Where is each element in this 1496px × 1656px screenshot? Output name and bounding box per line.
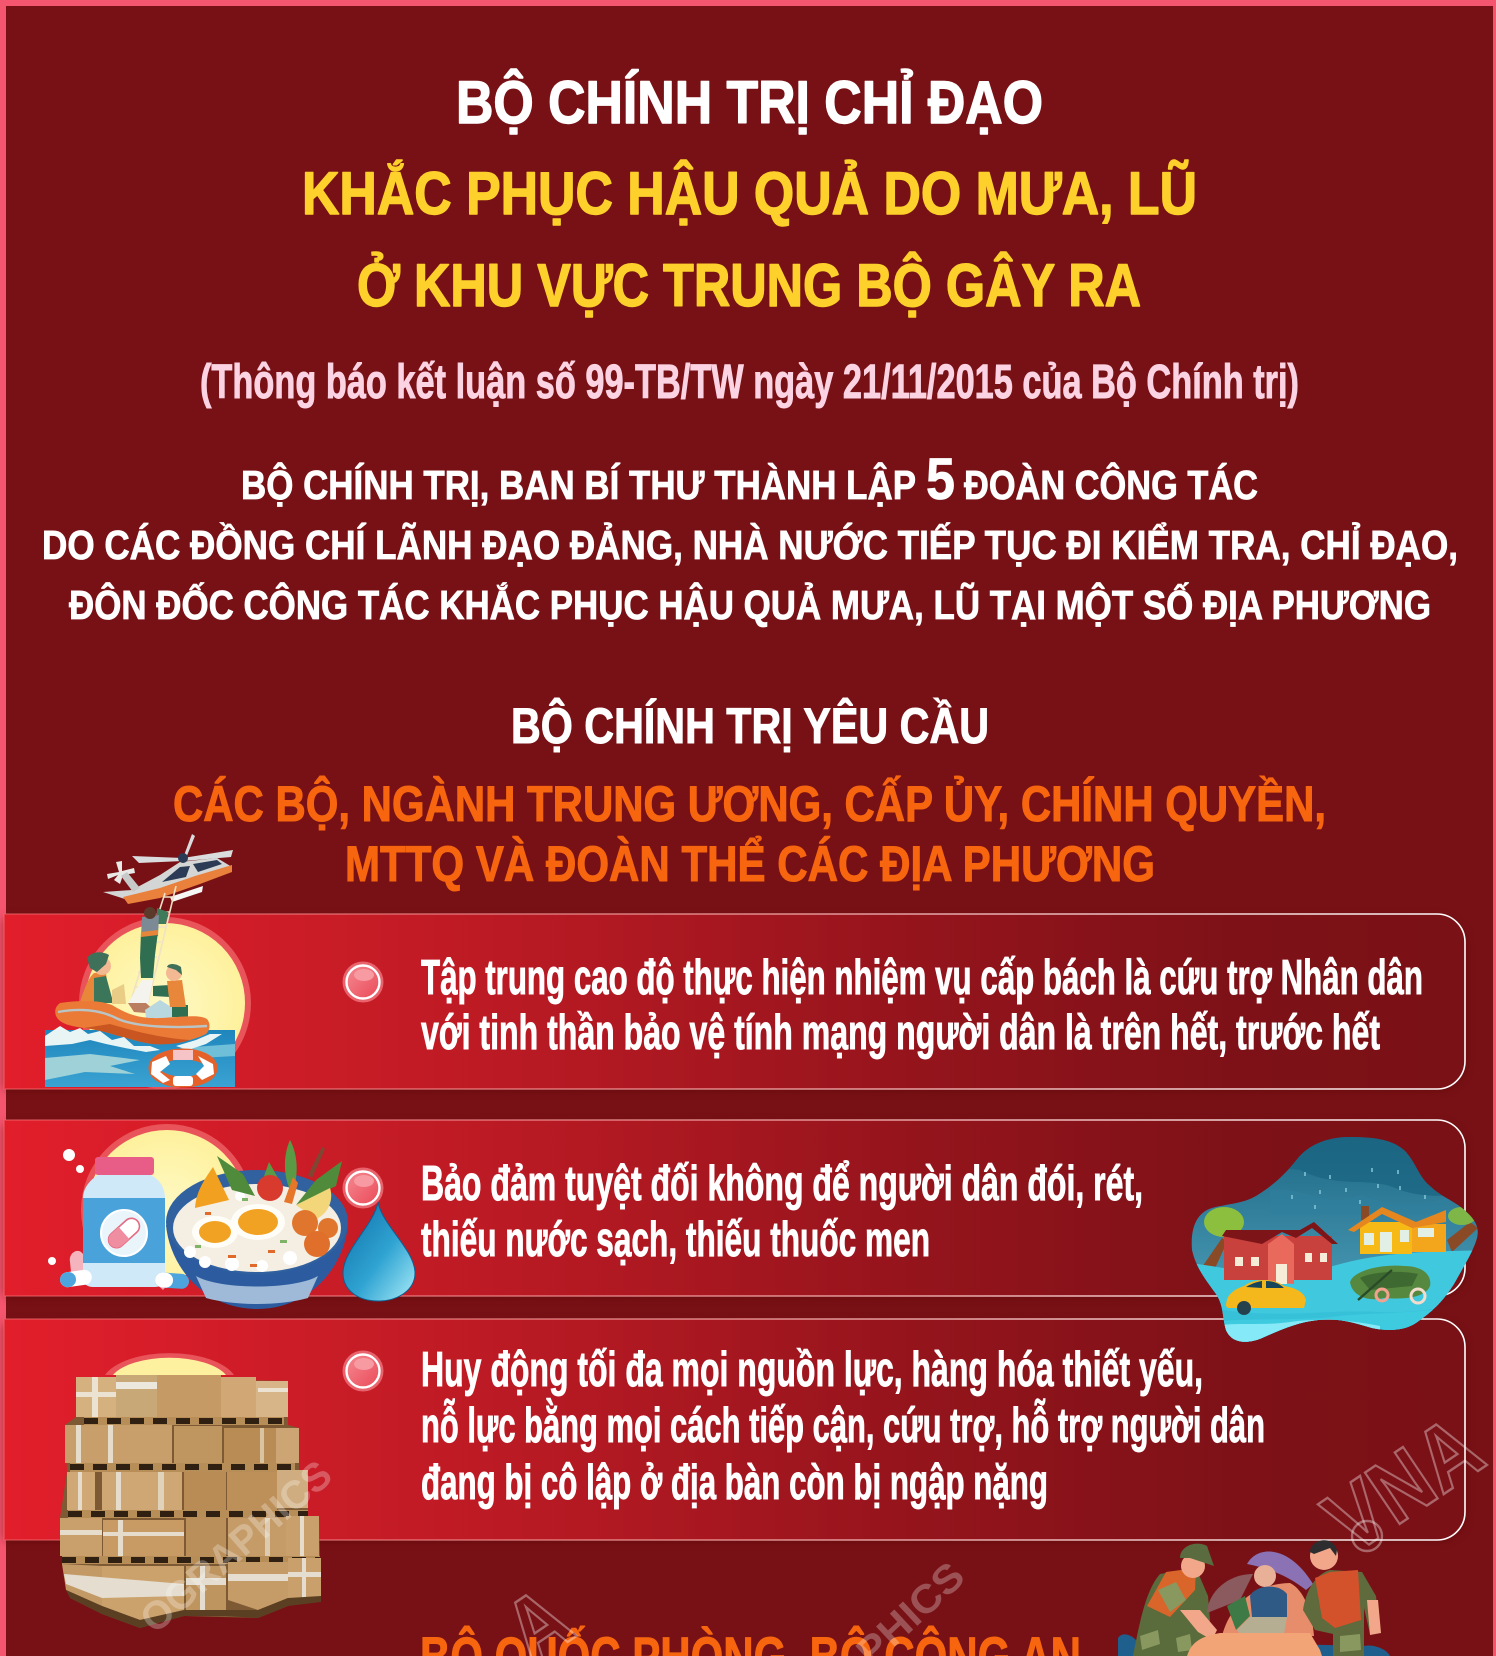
capsule pills front	[59, 1269, 190, 1289]
medicine jar	[83, 1157, 165, 1287]
grandmother with purple umbrella	[1227, 1551, 1313, 1634]
flood water	[1196, 1250, 1472, 1342]
yellow house	[1348, 1206, 1446, 1254]
brown umbrella	[1207, 1574, 1253, 1613]
raft	[1187, 1633, 1322, 1656]
trees	[1204, 1238, 1224, 1267]
dark backing behind the stack	[60, 1377, 321, 1628]
panel: mobilize resources task	[4, 1319, 1465, 1540]
bullet 3	[342, 1350, 384, 1392]
watermark: infographics: OGRAPHICS	[132, 1452, 341, 1642]
icon: medicine, food bowl and water drop	[48, 1127, 415, 1309]
garnish	[195, 1167, 229, 1208]
panel 1 text	[421, 951, 1423, 1060]
row 2	[65, 1425, 299, 1472]
watermark: VNA	[487, 1397, 1496, 1656]
white relief sack	[128, 980, 174, 1018]
soldier left	[1133, 1544, 1217, 1656]
yellow car	[1226, 1280, 1306, 1315]
heading: ministries and localities	[173, 775, 1326, 892]
icon: stacked cardboard boxes	[60, 1353, 321, 1628]
seated rescuer left	[80, 952, 126, 1004]
icon: rescue boat and helicopter	[45, 834, 248, 1087]
text block: five working delegations: BỘ CHÍNH TRỊ, BAN BÍ THƯ THÀNH LẬP	[241, 462, 916, 508]
bullet 1	[342, 962, 384, 1002]
row 4	[60, 1516, 320, 1564]
panel 2 text: thiếu nước sạch, thiếu thuốc men	[421, 1213, 930, 1267]
capsule pills behind	[70, 1251, 90, 1282]
water drop	[343, 1202, 415, 1301]
watermark: infographics	[132, 1452, 973, 1656]
raft backrest	[1222, 1583, 1314, 1636]
text block: five working delegations: 5	[926, 447, 955, 512]
sea foam	[45, 1026, 222, 1052]
rescue ladder	[130, 886, 176, 1003]
panel 3 text	[421, 1343, 1265, 1510]
heading: politburo requests: BỘ CHÍNH TRỊ YÊU CẦU	[511, 697, 989, 754]
title: KHẮC PHỤC HẬU QUẢ DO MƯA, LŨ	[302, 160, 1197, 227]
panel 2 text	[421, 1157, 1143, 1267]
bullet 2	[342, 1168, 384, 1208]
sparkles	[48, 1149, 84, 1265]
rain	[1292, 1168, 1425, 1209]
icon: flooded village	[1192, 1137, 1478, 1342]
helicopter	[103, 834, 233, 904]
row 3	[67, 1470, 308, 1518]
row 5	[62, 1558, 321, 1628]
text block: five working delegations	[42, 447, 1458, 628]
foreground water	[1224, 1310, 1432, 1342]
climbing rescuer	[140, 907, 168, 978]
bowl	[166, 1140, 348, 1309]
soldier right	[1303, 1540, 1381, 1656]
title: Ở KHU VỰC TRUNG BỘ GÂY RA	[357, 252, 1141, 319]
panel 3 text: đang bị cô lập ở địa bàn còn bị ngập nặng	[421, 1456, 1048, 1510]
panel 2 text: Bảo đảm tuyệt đối không để người dân đói, rét,	[421, 1157, 1143, 1211]
lifebuoy	[151, 1050, 214, 1086]
illustration: soldiers carrying people on raft	[1118, 1540, 1390, 1656]
inflatable boat	[55, 1001, 210, 1044]
sea	[45, 1030, 235, 1087]
text block: five working delegations: ĐOÀN CÔNG TÁC	[964, 462, 1258, 508]
mid water	[1217, 1296, 1445, 1342]
title	[302, 69, 1197, 319]
row 1	[76, 1375, 288, 1425]
title: BỘ CHÍNH TRỊ CHỈ ĐẠO	[456, 69, 1043, 136]
seated rescuer right	[153, 964, 188, 1017]
heading: ministries and localities: MTTQ VÀ ĐOÀN THỂ CÁC ĐỊA PHƯƠNG	[345, 836, 1155, 892]
panel: food, water, medicine task	[4, 1120, 1465, 1296]
panel: rescue task	[4, 914, 1465, 1089]
green dinghy	[1350, 1266, 1430, 1303]
red house	[1222, 1222, 1338, 1284]
